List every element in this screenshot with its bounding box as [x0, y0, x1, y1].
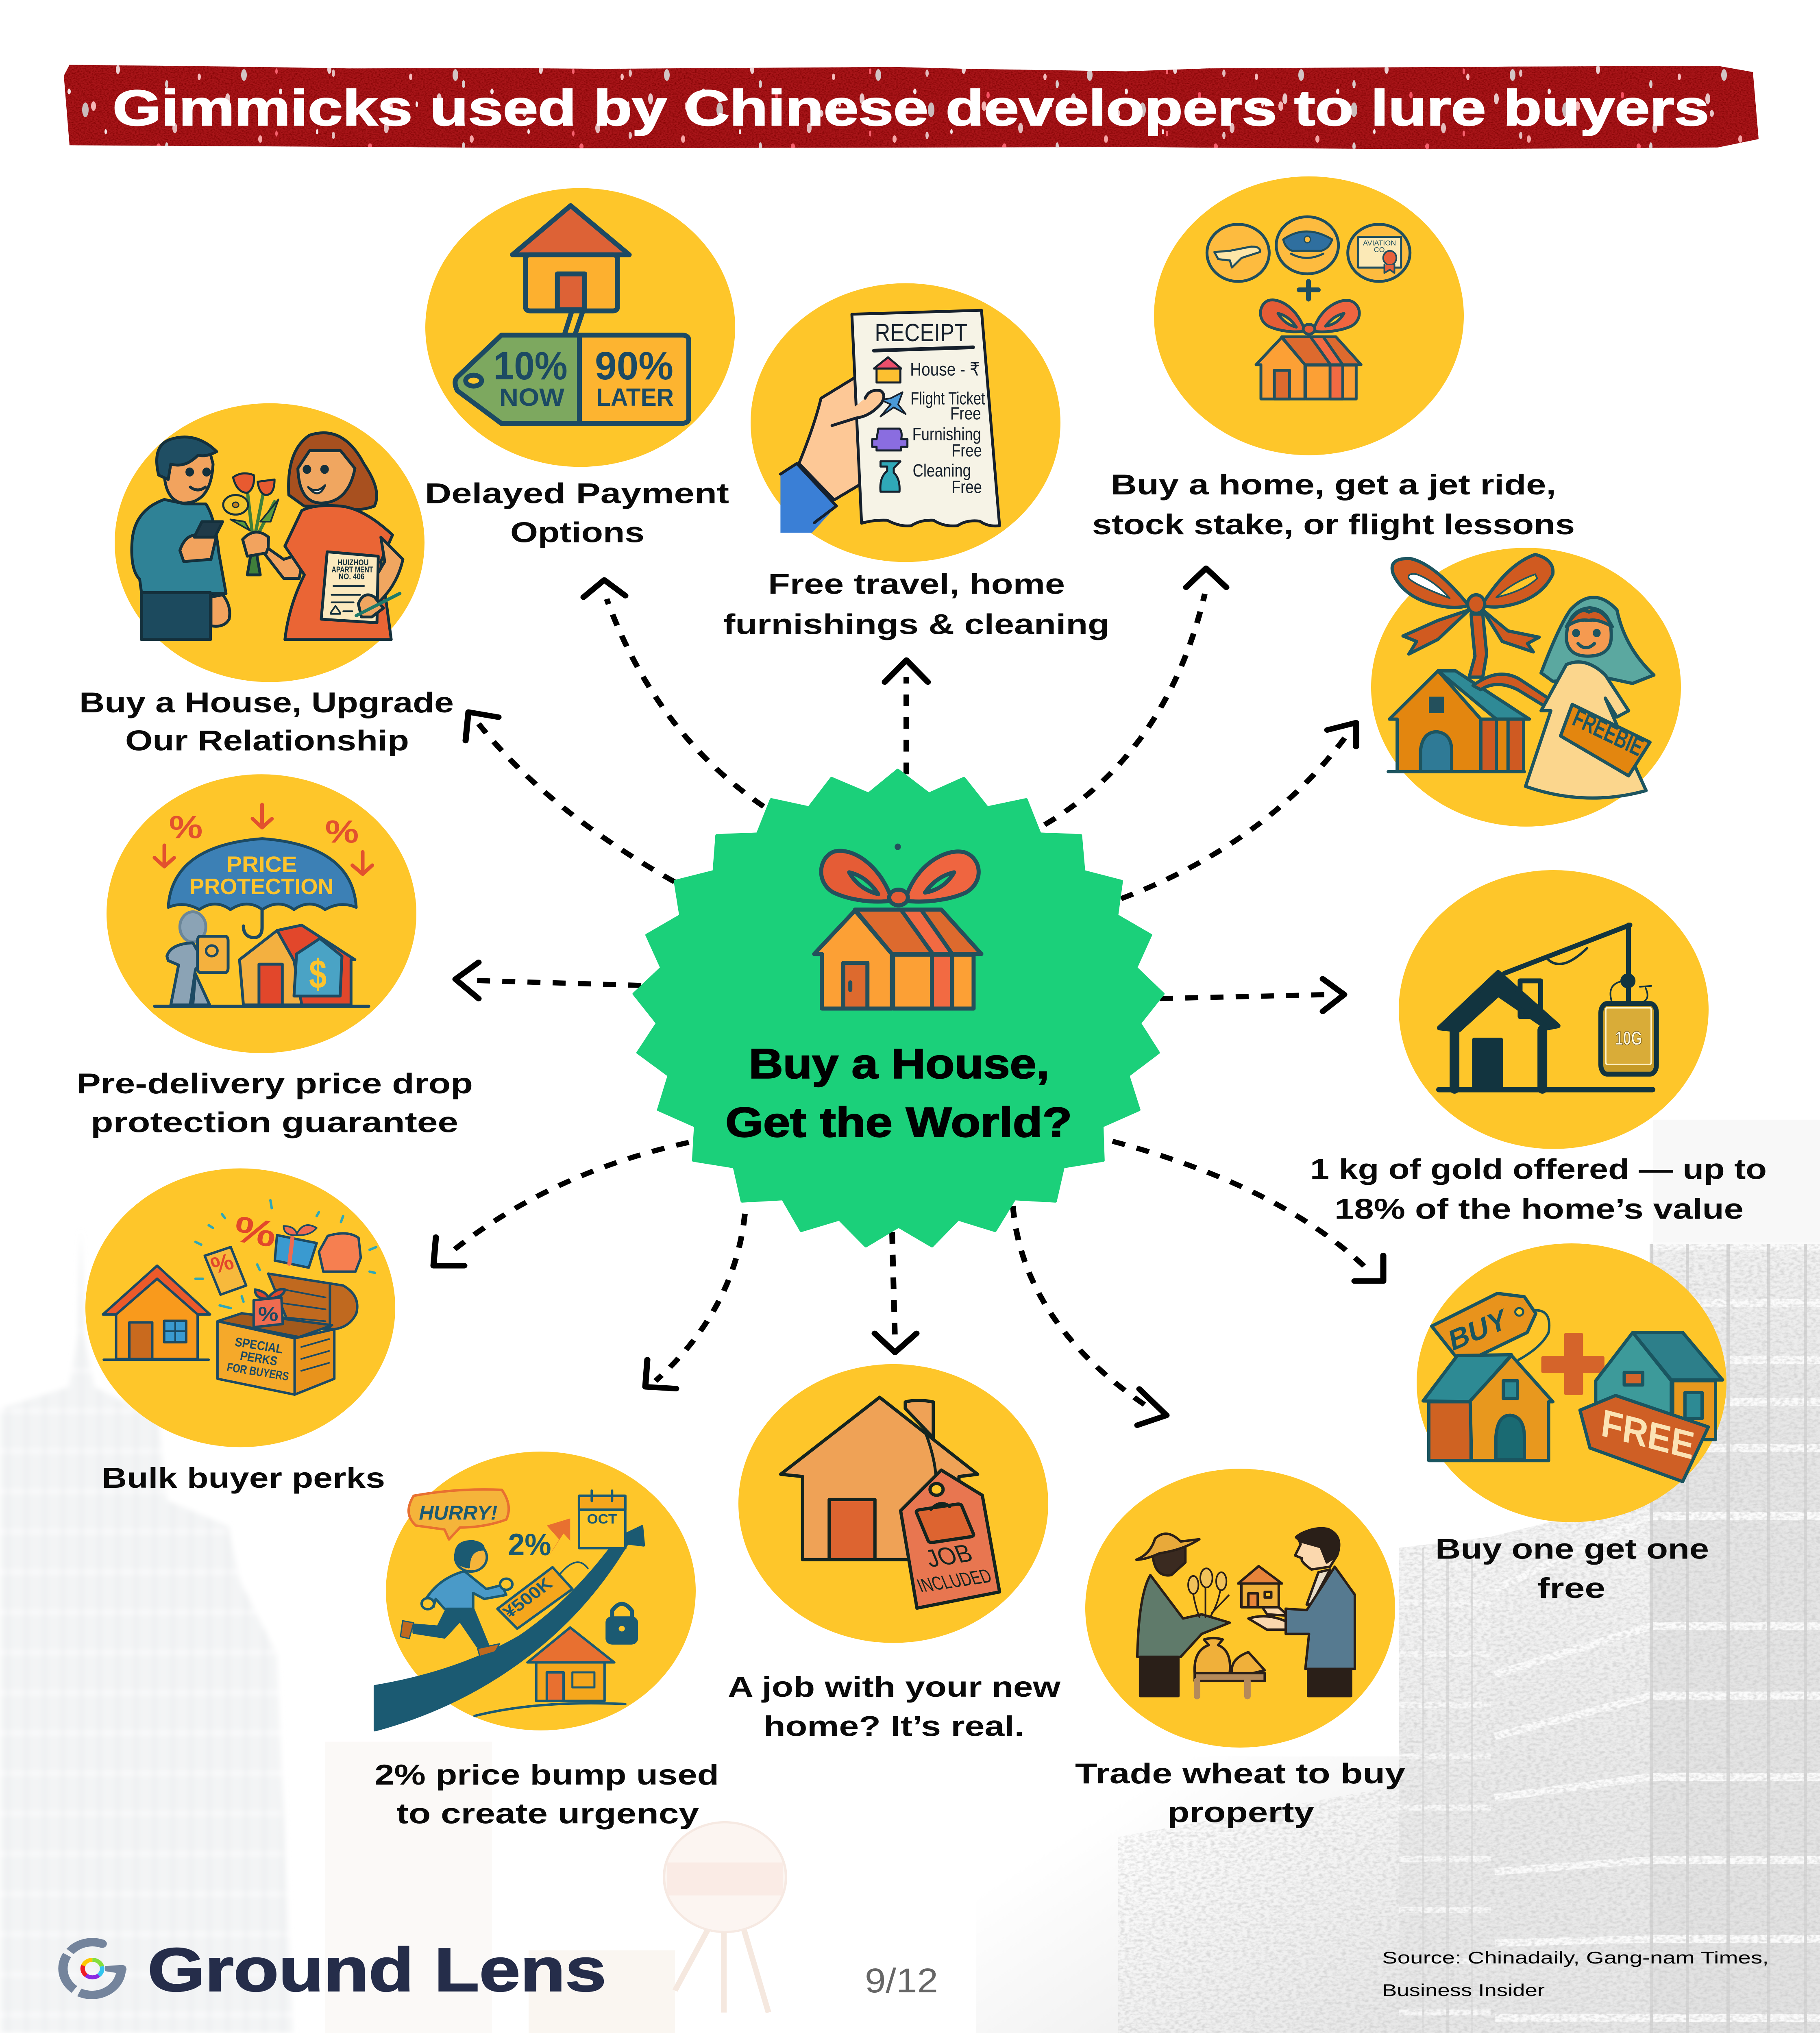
- arrow to job: [875, 1232, 917, 1352]
- label: [79, 687, 454, 757]
- icon: house with job tag: [781, 1397, 999, 1608]
- icon: house and treasure chest of perks: FOR BUYERS: [226, 1360, 290, 1383]
- icon: aviation badges plus gift house: AVIATION: [1363, 239, 1396, 247]
- icon: couple with flowers and contract: HUIZHOU: [337, 558, 369, 567]
- arrow to bulk perks: [433, 1143, 689, 1266]
- label: Trade wheat to buy: [1075, 1758, 1405, 1789]
- label: 2% price bump used: [374, 1759, 719, 1791]
- panel: price bump urgency: [374, 1452, 719, 1829]
- panel: bulk buyer perks: [85, 1168, 395, 1494]
- panel: price drop protection: [76, 774, 473, 1138]
- panel: delayed payment: [425, 188, 735, 549]
- icon: two houses with buy and free tags: FREE: [1599, 1401, 1697, 1468]
- arrows radiating from the centre: [433, 568, 1383, 1425]
- left tower: [0, 1230, 293, 2033]
- panel: buy a house, upgrade our relationship: [79, 403, 454, 757]
- icon: house and treasure chest of perks: PERKS: [239, 1348, 279, 1368]
- footer logo: Ground Lens: [63, 1935, 606, 2004]
- icon: house with 10/90 tag: [455, 206, 689, 423]
- page number: 9/12: [865, 1961, 938, 2000]
- icon: house with 10/90 tag: NOW: [499, 384, 564, 411]
- panel: buy one get one free: [1417, 1243, 1726, 1604]
- icon: hand holding receipt: Free: [951, 441, 982, 460]
- icon: gift house small: [1256, 300, 1361, 399]
- arrow to delayed payment: [583, 580, 764, 806]
- arrow to jet ride: [1045, 568, 1226, 825]
- icon: house with 10/90 tag: 90%: [595, 344, 673, 388]
- source credit: [1382, 1948, 1769, 2000]
- arrow to relationship: [466, 712, 675, 882]
- label: [723, 568, 1110, 640]
- icon: aviation badges plus gift house: CO: [1374, 246, 1385, 254]
- source credit: Business Insider: [1382, 1981, 1545, 2000]
- label: free: [1537, 1572, 1605, 1604]
- icon: two houses with buy and free tags: [1423, 1293, 1723, 1482]
- centre heading: Get the World?: [725, 1099, 1072, 1145]
- label: [76, 1068, 473, 1138]
- yellow circle: [1085, 1469, 1395, 1748]
- centre heading: Buy a House,: [749, 1040, 1049, 1087]
- icon: couple with flowers and contract: NO. 406: [339, 572, 364, 581]
- label: Free travel, home: [768, 568, 1065, 600]
- label: 1 kg of gold offered — up to: [1310, 1153, 1767, 1185]
- panel: free travel, furnishings and cleaning: [723, 283, 1110, 640]
- icon: price protection umbrella: %: [169, 810, 202, 845]
- icon: hand holding receipt: Furnishing: [912, 424, 981, 444]
- label: [1310, 1153, 1767, 1225]
- icon: hand holding receipt: Cleaning: [913, 461, 971, 481]
- label: Bulk buyer perks: [102, 1462, 385, 1494]
- label: [1075, 1758, 1405, 1828]
- arrow to wheat: [1013, 1206, 1167, 1425]
- icon: price protection umbrella: PRICE: [226, 853, 297, 877]
- icon: hand holding receipt: [780, 310, 999, 533]
- label: [728, 1671, 1060, 1742]
- icon: house with 10/90 tag: 10%: [494, 344, 568, 388]
- label: stock stake, or flight lessons: [1092, 509, 1575, 540]
- yellow circle: [107, 774, 416, 1053]
- yellow circle: [1399, 870, 1709, 1149]
- yellow circle: [751, 283, 1060, 562]
- label: Buy a home, get a jet ride,: [1111, 468, 1556, 501]
- icon: bride, house and bow: [1388, 555, 1654, 798]
- icon: price protection umbrella: PROTECTION: [189, 875, 334, 899]
- yellow circle: [386, 1452, 696, 1730]
- icon: farmer trading wheat with agent: [1136, 1528, 1355, 1696]
- yellow circle: [738, 1364, 1048, 1643]
- label: Delayed Payment: [425, 477, 729, 509]
- star shape: [634, 770, 1163, 1246]
- label: [425, 477, 729, 549]
- arrow to price bump: [645, 1214, 745, 1389]
- icon: runner, rising arrow, house: ¥500K: [499, 1574, 556, 1622]
- label: Pre-delivery price drop: [76, 1068, 473, 1099]
- label: [1092, 468, 1575, 540]
- label: Buy one get one: [1435, 1533, 1709, 1565]
- icon: runner, rising arrow, house: HURRY!: [419, 1502, 497, 1524]
- label: home? It’s real.: [764, 1710, 1024, 1742]
- panel: trade wheat for property: [1075, 1469, 1405, 1828]
- label: furnishings & cleaning: [723, 608, 1110, 640]
- brand name: Ground Lens: [148, 1935, 606, 2004]
- label: 18% of the home’s value: [1335, 1193, 1744, 1225]
- icon: gift house: [814, 851, 982, 1008]
- yellow circle: [115, 403, 425, 682]
- arrow to freebie: [1121, 723, 1356, 899]
- icon: price protection umbrella: $: [309, 952, 327, 997]
- icon: lens ring: [63, 1939, 126, 1995]
- icon: price protection umbrella: [155, 805, 372, 1006]
- title banner: [61, 62, 1765, 152]
- icon: aviation badges plus gift house: [1207, 217, 1410, 299]
- icon: house with 10/90 tag: LATER: [596, 384, 674, 411]
- icon: house with job tag: INCLUDED: [914, 1565, 995, 1596]
- arrow to gold: [1160, 979, 1344, 1011]
- icon: couple with flowers and contract: APART MENT: [331, 565, 373, 574]
- label: [374, 1759, 719, 1829]
- icon: bride, house and bow: FREEBIE: [1569, 703, 1647, 762]
- small dot: [895, 844, 901, 850]
- right buildings: [977, 1244, 1820, 2033]
- icon: house with gold bar on fishing rod: [1439, 925, 1657, 1090]
- icon: hand holding receipt: Flight Ticket: [910, 389, 985, 408]
- icon: hand holding receipt: Free: [950, 404, 981, 423]
- icon: house and treasure chest of perks: %: [231, 1208, 280, 1255]
- label: A job with your new: [728, 1671, 1060, 1703]
- title text: Gimmicks used by Chinese developers to lure buyers: [113, 80, 1709, 136]
- icon: house with job tag: JOB: [921, 1539, 977, 1572]
- pearl tower and base: [325, 1742, 786, 2033]
- label: Buy a House, Upgrade: [79, 687, 454, 718]
- yellow circle: [85, 1168, 395, 1447]
- icon: house and treasure chest of perks: [103, 1200, 376, 1395]
- label: property: [1167, 1796, 1314, 1828]
- panel: freebie bride: [1371, 548, 1681, 827]
- label: protection guarantee: [91, 1106, 458, 1138]
- arrow to buy one get one: [1112, 1141, 1383, 1281]
- icon: house and treasure chest of perks: %: [207, 1248, 237, 1279]
- panel: jet ride, stock stake or flight lessons: [1092, 176, 1575, 540]
- label: Options: [510, 516, 644, 549]
- icon: hand holding receipt: RECEIPT: [875, 319, 967, 347]
- icon: price protection umbrella: %: [325, 814, 359, 850]
- source credit: Source: Chinadaily, Gang-nam Times,: [1382, 1948, 1769, 1967]
- centre starburst: [634, 770, 1163, 1246]
- icon: hand holding receipt: House - ₹: [910, 359, 980, 379]
- yellow circle: [1371, 548, 1681, 827]
- centre heading: [725, 1040, 1072, 1145]
- arrow to price protection: [455, 962, 641, 999]
- panel: job with home: [728, 1364, 1060, 1742]
- label: [1435, 1533, 1709, 1604]
- icon: hand holding receipt: Free: [951, 477, 982, 497]
- yellow circle: [1417, 1243, 1726, 1522]
- background: faded city skyline: [2, 1244, 1820, 2033]
- label: to create urgency: [396, 1798, 699, 1829]
- label: Our Relationship: [125, 725, 409, 757]
- icon: house and treasure chest of perks: SPECIAL: [234, 1334, 284, 1356]
- icon: house with gold bar on fishing rod: 10G: [1615, 1027, 1642, 1049]
- panel: gold offer: [1310, 870, 1767, 1225]
- arrow to free travel: [885, 660, 928, 774]
- icon: two houses with buy and free tags: BUY: [1447, 1302, 1509, 1358]
- icon: house and treasure chest of perks: %: [258, 1303, 279, 1325]
- yellow circle: [1154, 176, 1464, 455]
- icon: couple with flowers and contract: [132, 433, 403, 640]
- icon: runner, rising arrow, house: [375, 1489, 644, 1730]
- icon: runner, rising arrow, house: OCT: [587, 1512, 617, 1527]
- icon: runner, rising arrow, house: 2%: [508, 1528, 551, 1562]
- yellow circle: [425, 188, 735, 467]
